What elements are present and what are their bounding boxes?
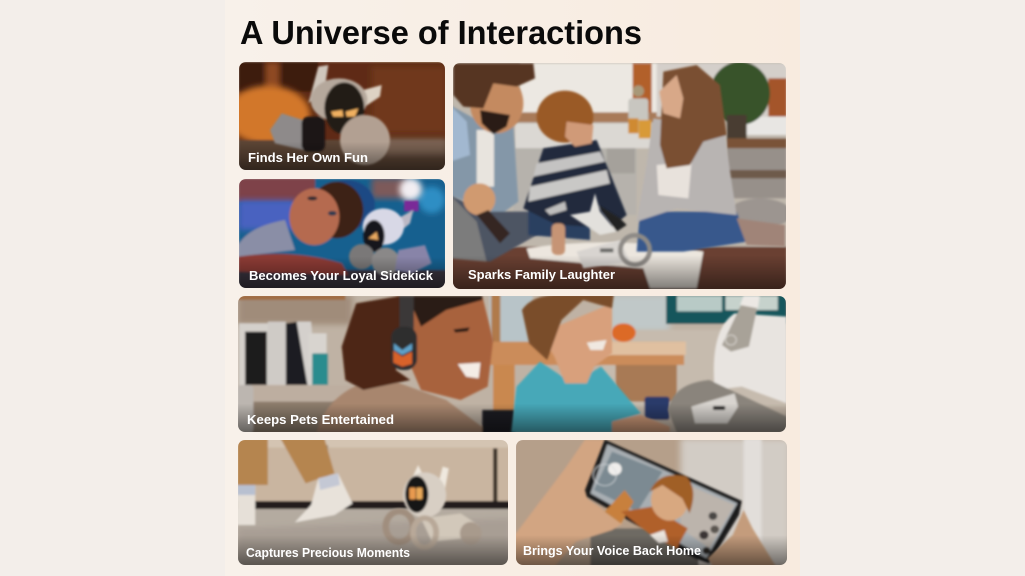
man bbox=[453, 63, 538, 262]
jars bbox=[628, 98, 648, 132]
panel: becomes your loyal sidekick bbox=[238, 178, 447, 290]
title: A Universe of Interactions bbox=[240, 14, 642, 51]
icon: robot and light bbox=[349, 178, 432, 276]
panel: keeps pets entertained bbox=[237, 295, 789, 435]
icon: robot bbox=[570, 193, 650, 268]
woman bbox=[316, 296, 515, 433]
caption: Sparks Family Laughter bbox=[468, 267, 615, 282]
panel: brings your voice back home bbox=[515, 438, 790, 567]
icon: phone video call bbox=[585, 440, 742, 563]
caption: Becomes Your Loyal Sidekick bbox=[249, 268, 434, 283]
girl bbox=[637, 65, 785, 252]
icon: robot bbox=[386, 465, 482, 547]
boy bbox=[523, 91, 627, 255]
icon: robot bbox=[270, 65, 390, 165]
legs bbox=[237, 438, 268, 485]
left hand bbox=[515, 440, 623, 567]
boy bbox=[511, 295, 670, 433]
right hand bbox=[708, 510, 776, 567]
caption: Finds Her Own Fun bbox=[248, 150, 368, 165]
caption: Keeps Pets Entertained bbox=[247, 412, 394, 427]
panel: sparks family laughter bbox=[450, 62, 792, 292]
panel: finds her own fun bbox=[227, 62, 447, 172]
caption: Captures Precious Moments bbox=[246, 545, 410, 560]
icon: robot bbox=[668, 296, 787, 433]
caption: Brings Your Voice Back Home bbox=[523, 543, 701, 558]
panel: captures precious moments bbox=[237, 438, 511, 567]
